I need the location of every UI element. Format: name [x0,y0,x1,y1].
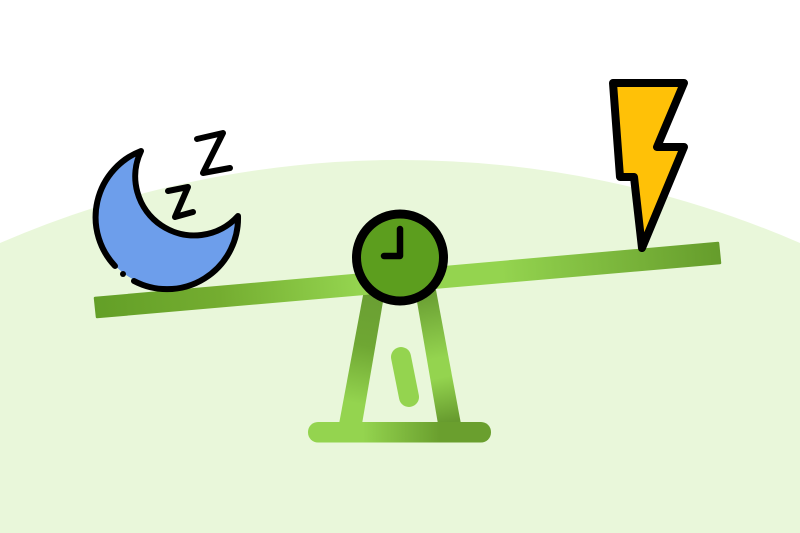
left leg [339,290,385,424]
icon: lightning bolt [613,83,684,248]
background hill [0,160,800,533]
moon outline [96,151,238,289]
centre pill [401,357,409,397]
seesaw stand [308,290,491,442]
icon: large Z [197,133,230,173]
icon: crescent moon [96,151,238,289]
right leg [415,290,461,424]
icon: clock [356,214,444,301]
seesaw plank [95,243,720,317]
icon: small Z [168,187,193,217]
clock hands [384,229,400,256]
outline dot [120,271,126,277]
base bar [308,422,491,442]
